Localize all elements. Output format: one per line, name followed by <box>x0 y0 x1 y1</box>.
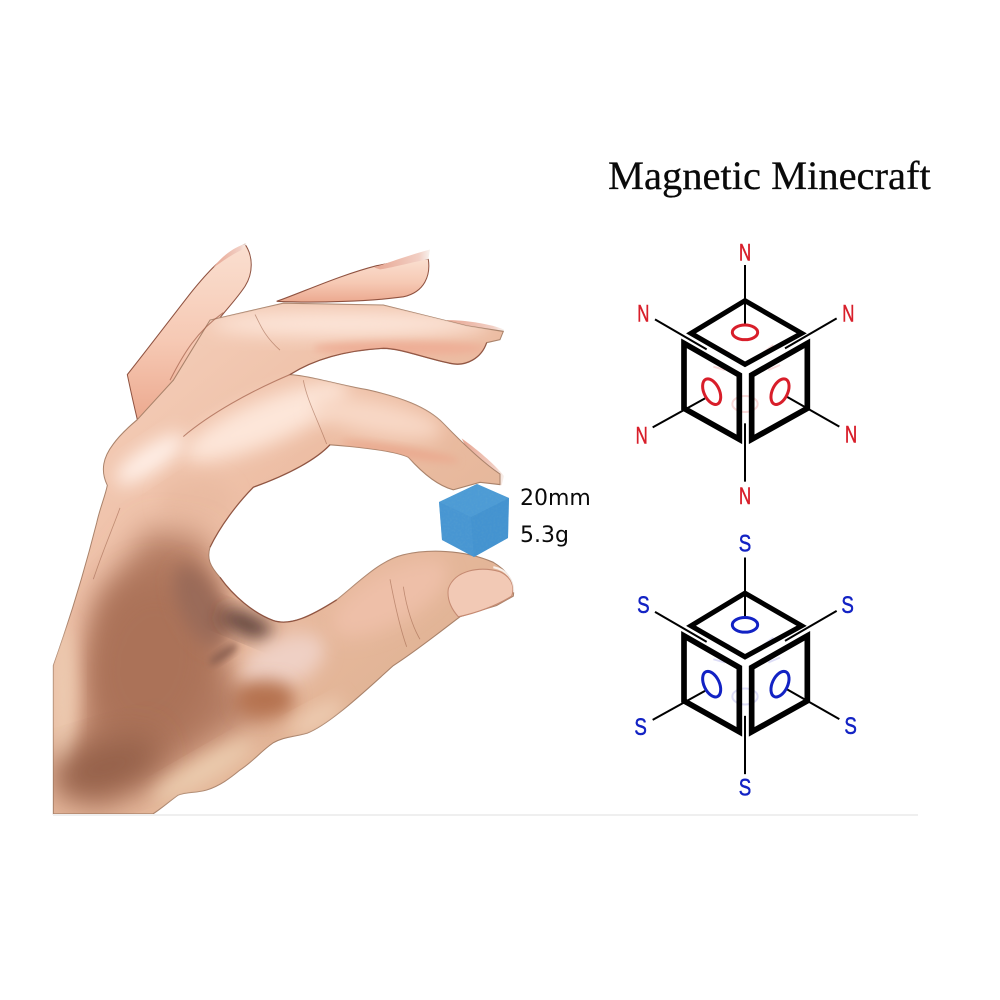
N labels: N <box>739 240 751 266</box>
photo: hand holding cube <box>46 244 514 814</box>
finger underside edges <box>210 343 487 622</box>
index finger nail <box>462 438 504 485</box>
faint pink centre marks <box>713 345 780 412</box>
S labels: S <box>637 592 650 619</box>
hand silhouette <box>53 303 514 814</box>
cube faces <box>684 301 807 439</box>
pole leader lines <box>653 265 839 482</box>
pole leader lines <box>653 557 839 774</box>
knuckle creases <box>93 314 420 647</box>
N labels: N <box>845 422 857 448</box>
thumb nail rim <box>493 567 514 592</box>
ring finger <box>277 259 429 302</box>
size label: 20mm <box>520 486 591 511</box>
N labels <box>636 240 857 510</box>
S labels: S <box>739 530 751 557</box>
S labels: S <box>634 714 647 740</box>
N labels: N <box>739 483 751 510</box>
infographic canvas <box>52 160 931 816</box>
S labels <box>634 530 857 801</box>
weight label: 5.3g <box>520 523 569 548</box>
finger separation lines <box>170 313 290 437</box>
thumb nail <box>448 569 513 617</box>
S labels: S <box>841 592 854 619</box>
middle finger nail <box>447 320 504 339</box>
little finger <box>127 244 251 420</box>
blue pole rings <box>699 617 793 700</box>
S labels: S <box>844 713 857 739</box>
N labels: N <box>637 301 649 327</box>
blue cube <box>439 484 509 557</box>
title: Magnetic Minecraft <box>608 153 931 198</box>
hand shading <box>46 311 490 810</box>
little finger nail <box>213 244 247 268</box>
cube faces <box>684 593 807 732</box>
faint blue centre marks <box>713 637 780 704</box>
diagram: south pole cube <box>634 530 857 801</box>
S labels: S <box>739 774 751 801</box>
ground line <box>53 814 918 816</box>
red pole rings <box>699 325 793 407</box>
diagram: north pole cube <box>636 240 857 510</box>
N labels: N <box>842 301 854 327</box>
N labels: N <box>636 422 648 449</box>
ring finger nail <box>374 250 430 269</box>
